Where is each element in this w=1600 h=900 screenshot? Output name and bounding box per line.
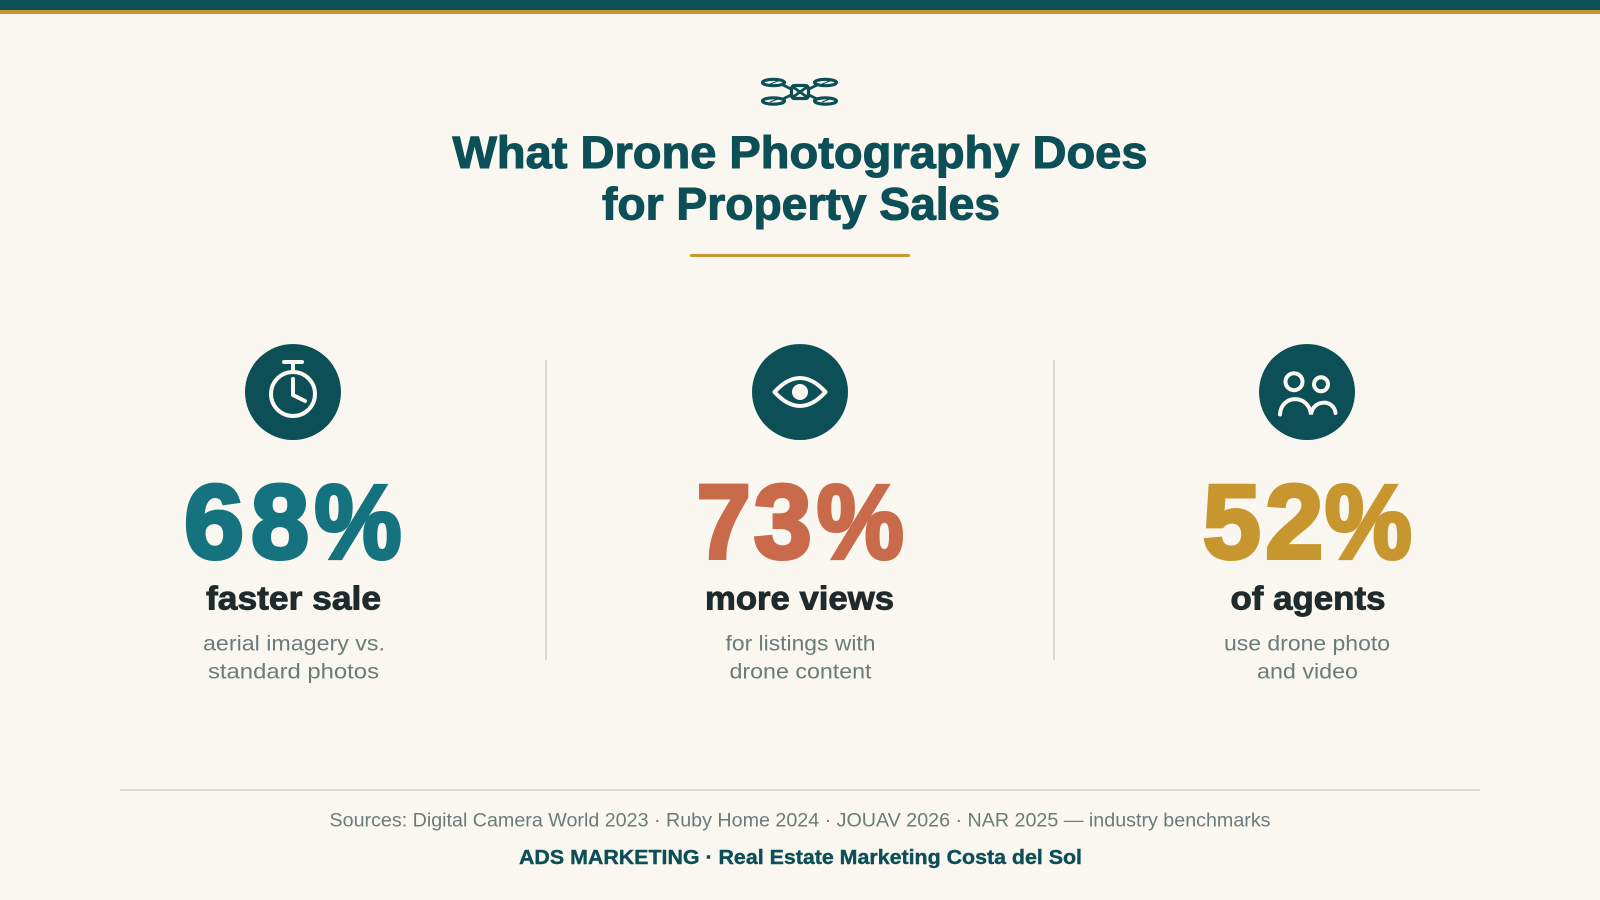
icon: drone bbox=[762, 79, 836, 104]
panel: of agents bbox=[1203, 344, 1412, 684]
stat: 68%: 6 bbox=[184, 464, 244, 581]
label: more views: more views bbox=[705, 580, 894, 616]
panel: more views bbox=[697, 344, 904, 684]
stat: 68%: % bbox=[314, 464, 402, 581]
sources: Sources: Digital Camera World 2023 · Ruby Home 2024 · JOUAV 2026 · NAR 2025 — industry benchmarks bbox=[330, 810, 1271, 832]
icon: stopwatch bbox=[245, 344, 341, 440]
stat: 52%: 5 bbox=[1203, 464, 1261, 581]
title: for Property Sales bbox=[602, 178, 1000, 230]
label: of agents: of agents bbox=[1230, 580, 1386, 616]
description: for listings with bbox=[726, 632, 876, 656]
panel: faster sale bbox=[184, 344, 402, 684]
stat: 73%: % bbox=[817, 464, 904, 581]
icon: people bbox=[1259, 344, 1355, 440]
stat: 73%: 3 bbox=[754, 464, 812, 581]
column divider bbox=[545, 360, 547, 660]
stat: 68% bbox=[184, 464, 402, 581]
footer rule bbox=[120, 789, 1480, 791]
stat: 73%: 7 bbox=[697, 464, 751, 581]
brand line: ADS MARKETING · Real Estate Marketing Costa del Sol bbox=[519, 846, 1082, 869]
description: drone content bbox=[730, 660, 872, 684]
column divider bbox=[1053, 360, 1055, 660]
description: use drone photo bbox=[1224, 632, 1390, 656]
description: standard photos bbox=[208, 660, 379, 684]
label: faster sale: faster sale bbox=[206, 580, 381, 616]
title underline bbox=[690, 254, 910, 257]
title: What Drone Photography Does bbox=[452, 127, 1148, 178]
stat: 52%: 2 bbox=[1265, 464, 1323, 581]
stat: 73% bbox=[697, 464, 904, 581]
description: aerial imagery vs. bbox=[203, 632, 385, 656]
stat: 52%: % bbox=[1325, 464, 1412, 581]
stat: 68%: 8 bbox=[251, 464, 309, 581]
description: and video bbox=[1257, 660, 1358, 684]
title bbox=[452, 127, 1148, 230]
description bbox=[203, 632, 385, 684]
top accent bar bbox=[0, 0, 1600, 14]
description bbox=[1224, 632, 1390, 684]
stat: 52% bbox=[1203, 464, 1412, 581]
description bbox=[726, 632, 876, 684]
icon: eye bbox=[752, 344, 848, 440]
